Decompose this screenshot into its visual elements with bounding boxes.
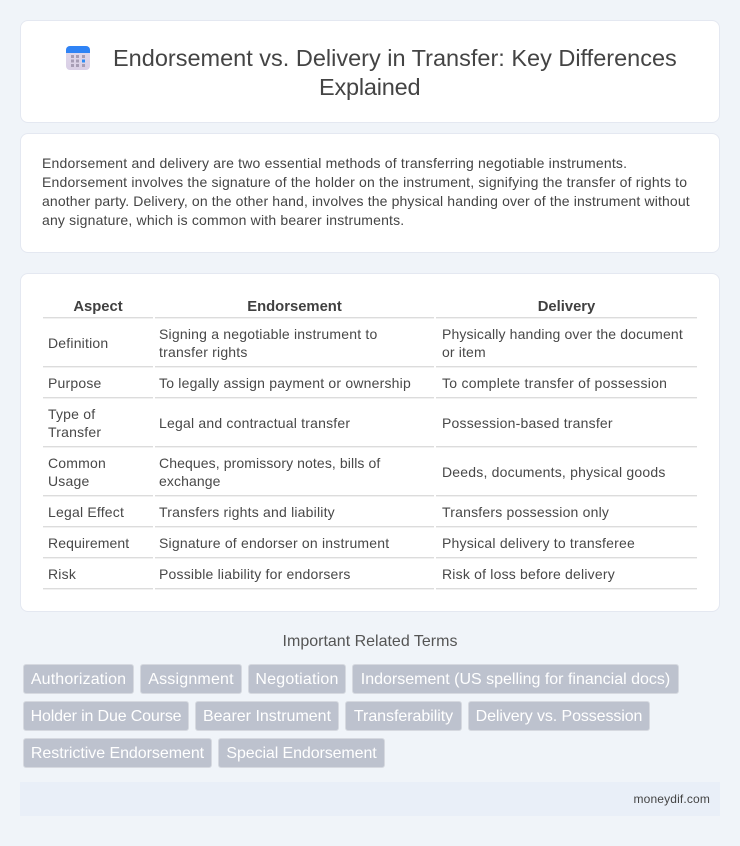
table header: Endorsement: Endorsement xyxy=(247,299,342,315)
comparison table: To complete transfer of possession xyxy=(442,375,667,391)
tag: Restrictive Endorsement xyxy=(31,745,204,762)
title: Endorsement vs. Delivery in Transfer: Key Differences xyxy=(113,45,677,71)
tag xyxy=(468,701,650,731)
comparison table: Deeds, documents, physical goods xyxy=(442,464,666,480)
table header: Aspect: Aspect xyxy=(73,299,123,315)
intro text: another party. Delivery, on the other hand, involves the physical handing over of the instrument without xyxy=(42,193,690,209)
comparison table: Cheques, promissory notes, bills of xyxy=(159,455,380,471)
tag xyxy=(140,664,242,694)
comparison table: To legally assign payment or ownership xyxy=(159,375,411,391)
comparison table xyxy=(43,299,697,590)
comparison table: Physically handing over the document xyxy=(442,326,683,342)
comparison table: Transfers possession only xyxy=(442,504,609,520)
tag: Authorization xyxy=(31,671,126,688)
tag xyxy=(195,701,339,731)
row: Definition: Definition xyxy=(48,335,108,351)
intro text: any signature, which is common with bearer instruments. xyxy=(42,212,404,228)
tag xyxy=(23,738,212,768)
tag xyxy=(218,738,385,768)
comparison table: Risk of loss before delivery xyxy=(442,566,615,582)
comparison table: Physical delivery to transferee xyxy=(442,535,635,551)
tag xyxy=(23,701,189,731)
comparison table: Possession-based transfer xyxy=(442,415,613,431)
comparison table: transfer rights xyxy=(159,344,248,360)
tag xyxy=(248,664,346,694)
comparison table: Signature of endorser on instrument xyxy=(159,535,389,551)
intro text: Endorsement involves the signature of the holder on the instrument, signifying the transfer of rights to xyxy=(42,174,687,190)
row: Common Usage: Common xyxy=(48,455,106,471)
comparison table: Legal and contractual transfer xyxy=(159,415,350,431)
title: Explained xyxy=(319,74,420,100)
row: Common Usage xyxy=(48,455,106,489)
tag: Bearer Instrument xyxy=(203,708,331,725)
footer bar xyxy=(20,782,720,816)
related term tags xyxy=(23,664,679,768)
panel: comparison table xyxy=(20,273,720,612)
related terms heading: Important Related Terms xyxy=(283,633,457,650)
tag xyxy=(352,664,679,694)
row: Requirement: Requirement xyxy=(48,535,129,551)
row: Type of Transfer xyxy=(48,406,101,440)
row: Type of Transfer: Transfer xyxy=(48,424,101,440)
tag: Delivery vs. Possession xyxy=(476,708,642,725)
panel: introduction xyxy=(20,133,720,253)
row: Risk: Risk xyxy=(48,566,76,582)
tag: Negotiation xyxy=(255,671,339,688)
row: Common Usage: Usage xyxy=(48,473,89,489)
icon: calendar xyxy=(66,46,90,70)
tag: Indorsement (US spelling for financial docs) xyxy=(361,671,670,688)
header panel xyxy=(20,20,720,123)
comparison table: or item xyxy=(442,344,486,360)
tag: Transferability xyxy=(354,708,453,725)
intro text: Endorsement and delivery are two essential methods of transferring negotiable instruments. xyxy=(42,155,627,171)
comparison table: Signing a negotiable instrument to xyxy=(159,326,378,342)
table header: Delivery: Delivery xyxy=(538,299,595,315)
tag xyxy=(23,664,134,694)
row: Legal Effect: Legal Effect xyxy=(48,504,124,520)
title xyxy=(113,45,677,100)
comparison table: Transfers rights and liability xyxy=(159,504,335,520)
tag: Holder in Due Course xyxy=(31,708,181,725)
row: Purpose: Purpose xyxy=(48,375,102,391)
comparison table: exchange xyxy=(159,473,221,489)
tag xyxy=(345,701,462,731)
footer source: moneydif.com xyxy=(634,792,710,806)
intro text xyxy=(42,155,690,228)
tag: Special Endorsement xyxy=(226,745,377,762)
tag: Assignment xyxy=(148,671,234,688)
row: Type of Transfer: Type of xyxy=(48,406,95,422)
comparison table: Possible liability for endorsers xyxy=(159,566,351,582)
